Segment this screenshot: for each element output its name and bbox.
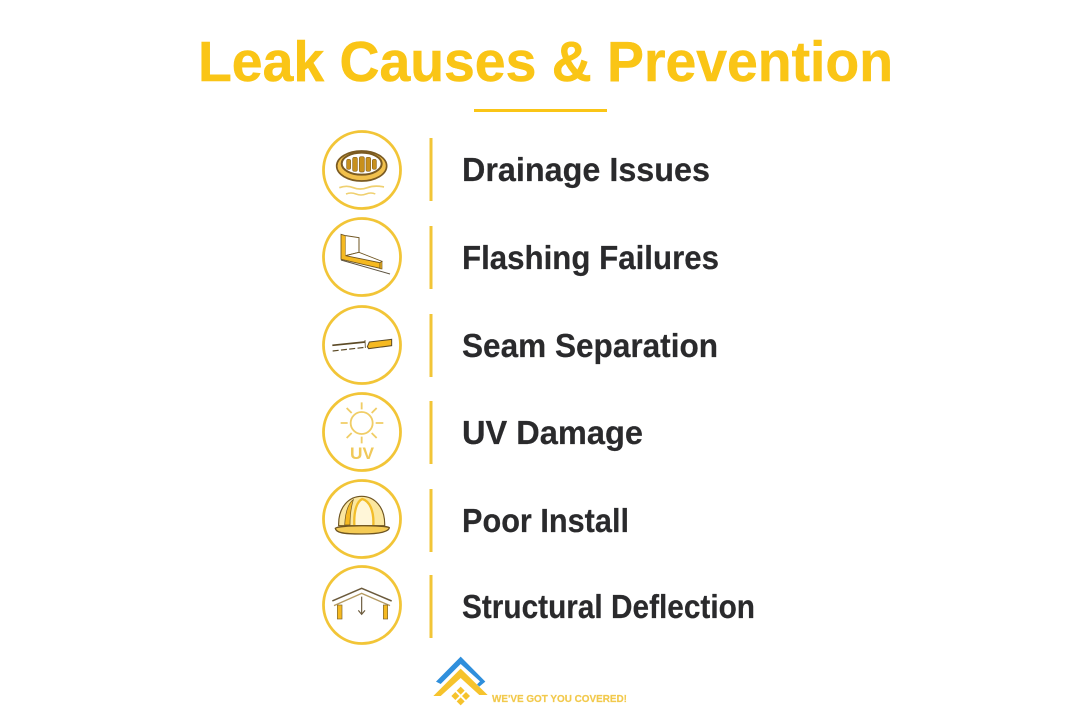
divider [430, 401, 432, 464]
label: Flashing Failures [462, 240, 719, 277]
title: Leak Causes & Prevention [198, 30, 893, 93]
icon: UV sun [324, 394, 400, 470]
icon: roof deflection [324, 566, 400, 644]
row: Seam Separation [324, 306, 718, 384]
icon: roof flashing [324, 218, 400, 296]
label: Seam Separation [462, 328, 718, 365]
divider [430, 489, 432, 552]
label: Structural Deflection [462, 589, 755, 626]
icon: separated seam [324, 306, 400, 384]
label: Poor Install [462, 503, 629, 540]
divider [430, 138, 432, 201]
icon: UV sun: UV [350, 444, 375, 463]
row: Flashing Failures [324, 218, 719, 296]
row: Drainage Issues [324, 132, 710, 208]
label: UV Damage [462, 415, 643, 452]
title underline [474, 109, 607, 112]
divider [430, 226, 432, 289]
divider [430, 575, 432, 638]
row: Poor Install [324, 480, 629, 558]
label: Drainage Issues [462, 152, 710, 189]
logo mark [433, 657, 488, 705]
icon: drain grate [324, 132, 400, 208]
logo tagline: WE'VE GOT YOU COVERED! [492, 694, 627, 705]
divider [430, 314, 432, 377]
row: Structural Deflection [324, 566, 755, 644]
row: UV Damage [324, 394, 643, 470]
icon: hard hat [324, 480, 400, 558]
logo [433, 657, 627, 705]
